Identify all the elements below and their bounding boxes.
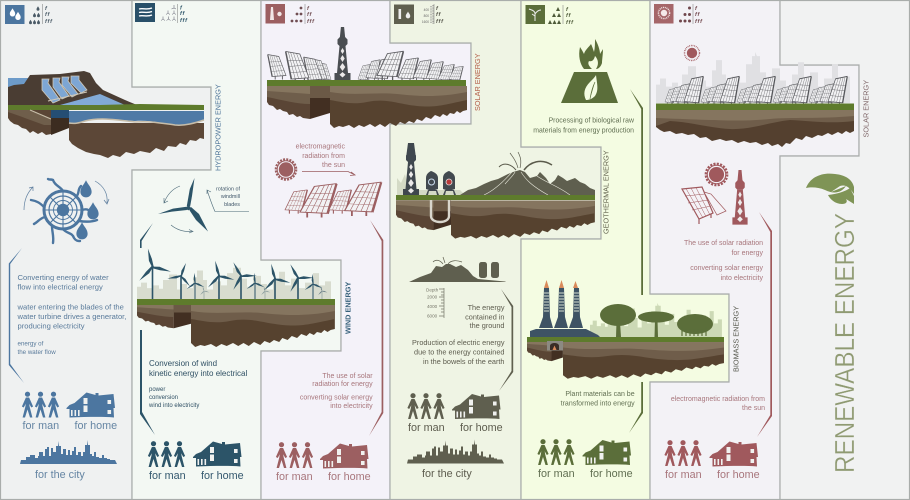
icon: solar panels	[285, 182, 382, 217]
icon: people	[664, 440, 702, 466]
text block: hydropower description: producing electricity	[18, 322, 85, 330]
icon: small sun	[684, 46, 700, 60]
text block: rotation of windmill blades: blades	[224, 202, 240, 208]
icon: city skyline	[407, 440, 504, 464]
icon: biomass badge and legend: ff	[566, 13, 572, 19]
panel: solar energy, tower	[266, 4, 482, 483]
icon: solar tower badge and legend: f	[307, 6, 310, 12]
icon: wind badge and legend: ff	[180, 11, 186, 17]
text block: electromagnetic radiation: electromagnetic radiation from	[671, 396, 765, 403]
text block: energy in the ground	[465, 303, 505, 330]
chart: depth scale	[426, 288, 444, 318]
icon: solar tower badge and legend	[266, 4, 315, 25]
illustration: geothermal plant and volcano	[396, 143, 595, 239]
text block: hydropower description: Converting energy of water	[18, 273, 109, 282]
text block: biological raw materials: materials from energy production	[533, 128, 634, 134]
text block: electromagnetic radiation: the sun	[322, 162, 345, 169]
chart: depth scale: Depth	[426, 288, 439, 292]
label: for man: for man	[665, 469, 702, 481]
text block: energy in the ground: the ground	[470, 321, 504, 330]
label: for man: for man	[22, 420, 59, 432]
label: for home: for home	[460, 422, 503, 434]
illustration: biomass plant with trees	[527, 280, 724, 379]
icon: people	[22, 392, 59, 418]
arrow: solar text bracket	[757, 212, 772, 437]
label: for home: for home	[328, 471, 371, 483]
icon: biomass badge and legend	[526, 5, 574, 26]
illustration: wind farm with terrain	[136, 249, 335, 347]
label: for man: for man	[538, 468, 575, 480]
icon: people	[276, 442, 313, 468]
label: for home: for home	[74, 420, 117, 432]
text block: wind description: wind into electricity	[148, 403, 199, 409]
text block: solar radiation use	[684, 240, 763, 282]
icon: solar badge and legend: fff	[695, 19, 703, 25]
text block: biological raw materials	[533, 118, 634, 134]
icon: people	[148, 441, 185, 467]
text block: solar radiation use: converting solar energy	[690, 265, 763, 272]
text block: energy in the ground: contained in	[465, 312, 504, 322]
icon: house	[710, 442, 758, 466]
text block: electric energy production: Production of electric energy	[412, 338, 505, 347]
icon: house	[193, 442, 242, 466]
text block: hydropower description: water turbine drives a generator,	[16, 312, 126, 321]
label: for home: for home	[590, 468, 633, 480]
text block: rotation of windmill blades: rotation of	[216, 186, 240, 192]
label: hydropower energy: HYDROPOWER ENERGY	[214, 84, 222, 171]
text block: electromagnetic radiation: the sun	[742, 405, 765, 412]
text block: plant materials	[561, 391, 635, 408]
text block: rotation of windmill blades	[216, 186, 240, 208]
icon: geothermal badge and legend: f	[436, 6, 439, 12]
icon: solar tower badge and legend: ff	[307, 12, 313, 18]
icon: solar badge and legend	[654, 4, 703, 25]
panel: biomass energy	[526, 5, 740, 480]
icon: house	[452, 394, 500, 419]
text block: wind description: kinetic energy into electrical	[149, 369, 247, 378]
label: for home: for home	[717, 469, 760, 481]
icon: biomass badge and legend: f	[566, 7, 569, 13]
icon: geothermal badge and legend: ff	[436, 12, 442, 18]
icon: geothermal badge and legend: 800	[424, 14, 429, 18]
panel: hydropower energy	[5, 4, 222, 481]
arrow: wind text bracket	[140, 330, 155, 435]
text block: biological raw materials: Processing of biological raw	[549, 118, 634, 124]
icon: wind badge and legend: fff	[180, 18, 188, 24]
label: wind energy: WIND ENERGY	[344, 282, 352, 334]
icon: biomass flame	[561, 39, 618, 103]
text block: wind description: power	[149, 387, 165, 393]
text block: electromagnetic radiation	[671, 396, 765, 412]
text block: hydropower description: energy of	[18, 340, 44, 348]
icon: small volcano and tanks	[409, 257, 506, 282]
icon: house	[66, 392, 115, 418]
icon: geothermal badge and legend: fff	[436, 19, 444, 25]
icon: house	[582, 440, 631, 465]
text block: wind description: conversion	[149, 395, 178, 401]
label: for home: for home	[201, 470, 244, 482]
text block: hydropower description	[16, 273, 126, 356]
text block: solar radiation use: for energy	[731, 250, 763, 257]
text block: hydropower description: flow into electrical energy	[18, 282, 103, 292]
icon: wind badge and legend	[135, 3, 188, 24]
arrow: radiation to panels	[302, 172, 355, 176]
panel: solar energy, farm	[654, 4, 870, 481]
label: solar energy: SOLAR ENERGY	[862, 80, 870, 138]
icon: hydropower badge and legend: f	[45, 6, 48, 12]
icon: biomass badge and legend: fff	[566, 20, 574, 26]
arrow: wind upper bracket	[140, 223, 153, 248]
arrow: hydropower text bracket	[9, 248, 24, 383]
label: for the city: for the city	[35, 469, 85, 481]
text block: electric energy production: due to the energy contained	[414, 348, 504, 356]
icon: hydropower badge and legend	[5, 4, 53, 25]
label: for man: for man	[408, 422, 445, 434]
icon: solar badge and legend: ff	[695, 12, 701, 18]
label: solar energy: SOLAR ENERGY	[473, 53, 482, 111]
panel: wind energy	[135, 3, 352, 482]
label: for the city: for the city	[422, 468, 472, 480]
text block: electric energy production: in the bowels of the earth	[423, 357, 504, 366]
arrow: solar text bracket	[369, 220, 383, 436]
arrow: biomass upper bracket	[630, 89, 643, 295]
arrow: geothermal text bracket	[499, 289, 513, 391]
icon: solar panel and tower	[682, 170, 748, 225]
text block: solar radiation use: The use of solar radiation	[684, 240, 763, 247]
icon: people	[407, 393, 445, 419]
icon: geothermal badge and legend: 400	[424, 8, 429, 12]
icon: water wheel with drops	[24, 179, 109, 243]
panel: renewable energy title	[806, 174, 860, 473]
icon: people	[537, 439, 575, 465]
text block: solar description: radiation for energy	[312, 381, 373, 388]
icon: city skyline	[20, 440, 117, 464]
icon: house	[320, 444, 368, 468]
text block: electromagnetic radiation: radiation from	[302, 153, 345, 160]
icon: sun	[276, 159, 296, 180]
text block: energy in the ground: The energy	[468, 303, 505, 312]
text block: electromagnetic radiation	[296, 144, 345, 169]
text block: hydropower description: water entering the blades of the	[16, 302, 124, 312]
text block: electromagnetic radiation: electromagnetic	[296, 144, 345, 150]
text block: wind description	[148, 359, 247, 409]
chart: depth scale: 6000	[427, 314, 438, 318]
icon: leaf	[806, 174, 854, 204]
text block: solar description	[300, 373, 373, 410]
label: geothermal energy: GEOTHERMAL ENERGY	[602, 150, 610, 234]
arrow: biomass lower bracket	[629, 382, 643, 433]
illustration: dam and reservoir	[8, 71, 204, 158]
title: RENEWABLE ENERGY	[829, 213, 860, 473]
text block: wind description: Conversion of wind	[149, 359, 217, 368]
text block: electric energy production	[412, 338, 505, 366]
icon: hydropower badge and legend: ff	[45, 12, 51, 18]
chart: depth scale: 4000	[427, 304, 438, 309]
illustration: solar farm with city	[656, 52, 854, 147]
panel: geothermal energy	[394, 4, 610, 480]
icon: sun	[706, 164, 727, 185]
icon: geothermal badge and legend: 1600	[422, 20, 429, 24]
chart: depth scale: 2000	[427, 294, 438, 300]
icon: hydropower badge and legend: fff	[45, 19, 53, 25]
text block: solar radiation use: into electricity	[721, 275, 763, 282]
text block: rotation of windmill blades: windmill	[220, 194, 240, 200]
text block: hydropower description: the water flow	[18, 349, 56, 356]
icon: wind rotor with rotation arrows	[158, 178, 249, 233]
text block: plant materials: Plant materials can be	[565, 391, 635, 398]
icon: solar tower badge and legend: fff	[307, 19, 315, 25]
icon: wind badge and legend: f	[180, 6, 183, 12]
illustration: solar farm with tower	[267, 27, 467, 128]
icon: solar badge and legend: f	[695, 6, 698, 12]
icon: geothermal badge and legend	[394, 4, 444, 25]
text block: solar description: into electricity	[330, 403, 373, 410]
text block: solar description: The use of solar	[322, 373, 373, 380]
label: for man: for man	[276, 471, 313, 483]
text block: solar description: converting solar energy	[300, 394, 373, 402]
text block: plant materials: transformed into energy	[561, 400, 635, 408]
label: biomass energy: BIOMASS ENERGY	[732, 306, 740, 372]
label: for man: for man	[149, 470, 186, 482]
